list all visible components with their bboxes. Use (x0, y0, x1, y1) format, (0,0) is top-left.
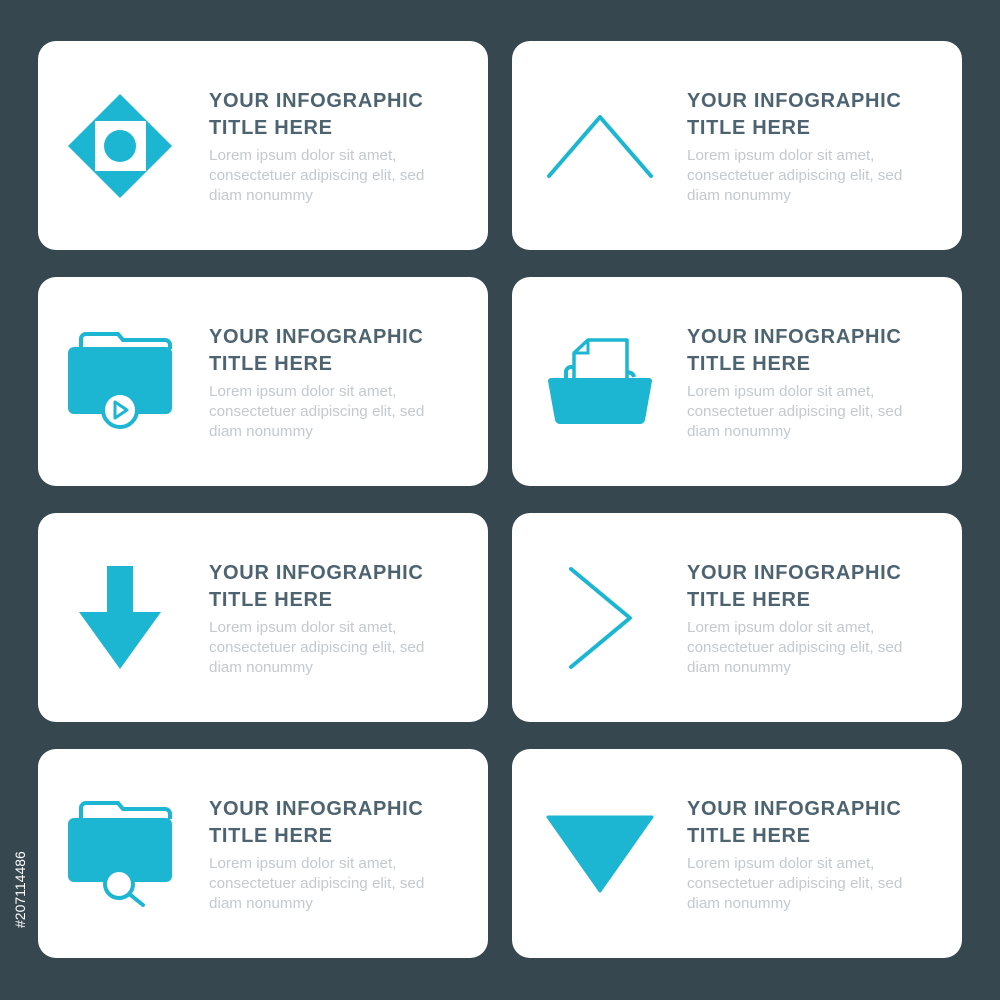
text 4 (687, 326, 902, 440)
text 5: consectetuer adipiscing elit, sed (209, 639, 424, 656)
text 8 (687, 798, 902, 912)
text 8: Lorem ipsum dolor sit amet, (687, 855, 874, 872)
card 5 (38, 513, 488, 722)
text 2: TITLE HERE (687, 117, 811, 139)
text 5 (209, 562, 424, 676)
text 2: diam nonummy (687, 187, 791, 204)
text 1: YOUR INFOGRAPHIC (209, 90, 424, 112)
text 5: Lorem ipsum dolor sit amet, (209, 619, 396, 636)
text 6: TITLE HERE (687, 589, 811, 611)
text 7: TITLE HERE (209, 825, 333, 847)
text 2: consectetuer adipiscing elit, sed (687, 167, 902, 184)
text 6 (687, 562, 902, 676)
text 8: YOUR INFOGRAPHIC (687, 798, 902, 820)
text 4: YOUR INFOGRAPHIC (687, 326, 902, 348)
text 3: consectetuer adipiscing elit, sed (209, 403, 424, 420)
text 4: diam nonummy (687, 423, 791, 440)
text 7: Lorem ipsum dolor sit amet, (209, 855, 396, 872)
card 8 (512, 749, 962, 958)
text 7: diam nonummy (209, 895, 313, 912)
text 2: Lorem ipsum dolor sit amet, (687, 147, 874, 164)
text 6: consectetuer adipiscing elit, sed (687, 639, 902, 656)
text 8: consectetuer adipiscing elit, sed (687, 875, 902, 892)
text 3: diam nonummy (209, 423, 313, 440)
text 3: TITLE HERE (209, 353, 333, 375)
text 6: diam nonummy (687, 659, 791, 676)
text 7: YOUR INFOGRAPHIC (209, 798, 424, 820)
text 3 (209, 326, 424, 440)
text 7 (209, 798, 424, 912)
text 1: consectetuer adipiscing elit, sed (209, 167, 424, 184)
card 7 (38, 749, 488, 958)
text 3: Lorem ipsum dolor sit amet, (209, 383, 396, 400)
text 2 (687, 90, 902, 204)
icon: basket with document (548, 340, 652, 424)
text 8: TITLE HERE (687, 825, 811, 847)
text 1: diam nonummy (209, 187, 313, 204)
text 3: YOUR INFOGRAPHIC (209, 326, 424, 348)
text 2: YOUR INFOGRAPHIC (687, 90, 902, 112)
card 2 (512, 41, 962, 250)
text 5: YOUR INFOGRAPHIC (209, 562, 424, 584)
text 1: TITLE HERE (209, 117, 333, 139)
text 4: Lorem ipsum dolor sit amet, (687, 383, 874, 400)
icon: folder search (68, 803, 172, 905)
text 1 (209, 90, 424, 204)
text 4: consectetuer adipiscing elit, sed (687, 403, 902, 420)
icon: chevron up (549, 117, 651, 176)
card 3 (38, 277, 488, 486)
icon: triangle down (548, 817, 652, 891)
card 1 (38, 41, 488, 250)
card 6 (512, 513, 962, 722)
icon: chevron right (571, 569, 630, 667)
text 4: TITLE HERE (687, 353, 811, 375)
icon: folder play (68, 334, 172, 427)
side id text: #207114486 (12, 851, 28, 928)
card 4 (512, 277, 962, 486)
text 8: diam nonummy (687, 895, 791, 912)
text 1: Lorem ipsum dolor sit amet, (209, 147, 396, 164)
icon: arrow down (79, 566, 161, 669)
icon: diamond (68, 94, 172, 198)
text 7: consectetuer adipiscing elit, sed (209, 875, 424, 892)
text 5: TITLE HERE (209, 589, 333, 611)
text 6: Lorem ipsum dolor sit amet, (687, 619, 874, 636)
text 5: diam nonummy (209, 659, 313, 676)
text 6: YOUR INFOGRAPHIC (687, 562, 902, 584)
